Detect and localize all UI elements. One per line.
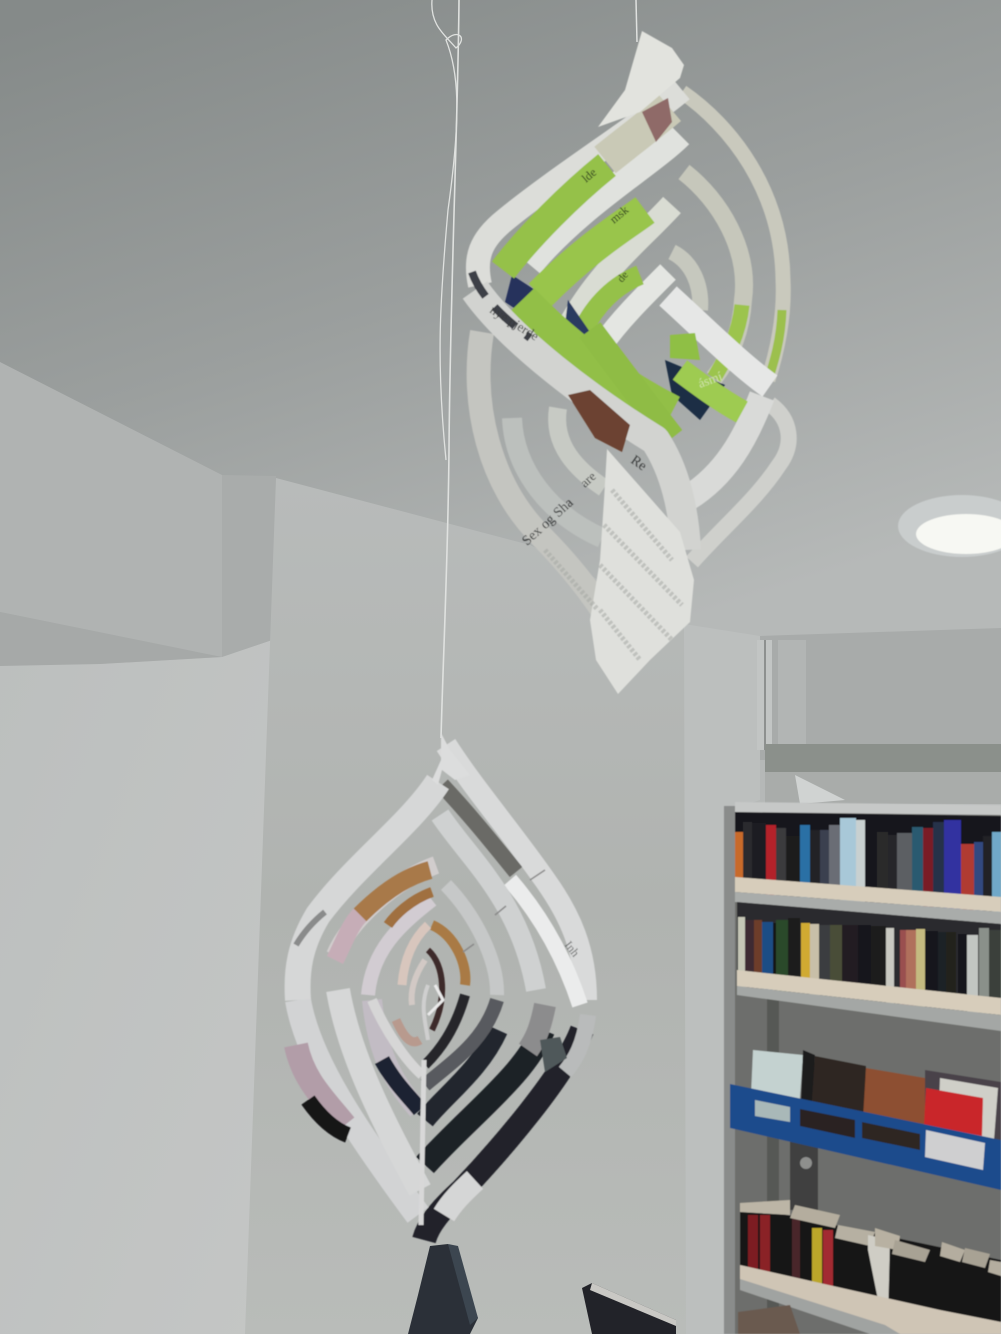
strip captions: msk xyxy=(607,203,631,226)
third left lower strip xyxy=(372,1000,420,1110)
bookcase cap xyxy=(735,802,1001,815)
books: bottom shelf xyxy=(740,1200,1001,1334)
light fixture bar xyxy=(765,744,1001,804)
second standing book xyxy=(582,1283,676,1334)
books below the bottom shelf xyxy=(738,1305,800,1334)
second top left strip xyxy=(335,865,436,960)
top tip xyxy=(432,733,470,785)
white diagonal strip xyxy=(668,296,770,386)
face strip xyxy=(475,290,686,550)
lower paper spiral ornament xyxy=(296,733,588,1240)
strip captions: Sex og Sha xyxy=(520,495,577,549)
shelf board: top xyxy=(735,892,1001,924)
middle right arc xyxy=(684,172,744,378)
second shelf shadow xyxy=(737,902,1001,1016)
top curl xyxy=(598,31,684,127)
ceiling xyxy=(0,0,1001,650)
book standing below ornament xyxy=(408,1244,478,1334)
back lower right dark strip xyxy=(424,1015,588,1240)
shelf board: bottom xyxy=(740,1279,900,1334)
upper left wall box xyxy=(0,362,276,666)
display books xyxy=(750,1050,1001,1150)
hanging thread xyxy=(432,0,637,738)
spine labels: bottom shelf xyxy=(740,1265,1001,1334)
right hand dark patch xyxy=(540,1037,567,1072)
back wall above the bookcase xyxy=(757,628,1001,760)
second left lower strip xyxy=(338,990,420,1190)
mirror notch marks xyxy=(463,870,545,952)
face photo xyxy=(568,390,630,452)
top outer strip with green panel xyxy=(478,90,682,285)
long lower-left text strip xyxy=(479,332,612,625)
top shelf shadow xyxy=(735,812,1001,910)
third ring xyxy=(368,885,497,1085)
lower right strips xyxy=(688,396,789,562)
books: second shelf xyxy=(738,917,1001,1016)
center ring xyxy=(412,950,443,1040)
spine labels: second shelf xyxy=(737,970,1001,1015)
small printed word: Inh xyxy=(562,938,583,959)
strip captions xyxy=(487,165,724,549)
left wall xyxy=(0,640,276,1334)
dark header on strip xyxy=(472,272,530,338)
spine labels: top shelf xyxy=(735,877,1001,912)
books: top shelf xyxy=(735,818,1001,916)
strip captions: are xyxy=(577,468,599,490)
strip captions: Re xyxy=(628,453,649,474)
bookcase upright xyxy=(724,806,818,1334)
second lower right dark strip xyxy=(425,1005,545,1165)
bookcase back panel xyxy=(730,806,1001,1334)
green band lower xyxy=(522,300,742,438)
inner right arc xyxy=(672,252,700,310)
strip captions: ásmí xyxy=(696,368,724,391)
strip captions: de xyxy=(615,269,631,285)
outer top left strip xyxy=(296,782,438,1000)
dark magazine accents xyxy=(505,275,725,420)
printed sheet tail xyxy=(590,449,694,694)
outer right arc xyxy=(682,92,783,381)
fourth ring xyxy=(372,925,465,1075)
strip captions: nye pjerde xyxy=(487,302,542,344)
second top right strip xyxy=(440,815,536,990)
rack label card xyxy=(925,1130,985,1170)
printed text texture xyxy=(545,490,682,660)
bookcase xyxy=(724,802,1001,1334)
outer top right strip xyxy=(442,745,586,1005)
ceiling lamp xyxy=(898,495,1001,557)
third lower right strip xyxy=(425,1030,498,1120)
strip captions: lde xyxy=(579,165,599,185)
upper paper spiral ornament xyxy=(472,31,789,694)
face photo on top strip xyxy=(642,98,672,142)
main wall xyxy=(245,478,690,1334)
lower left inner arcs xyxy=(512,408,604,538)
shelf board: second xyxy=(737,986,1001,1031)
vertical seam xyxy=(421,1060,424,1225)
central strips xyxy=(530,135,680,345)
outer left lower strip xyxy=(296,1000,418,1215)
right side wall xyxy=(684,624,760,1334)
blue display rack xyxy=(730,1084,1001,1190)
